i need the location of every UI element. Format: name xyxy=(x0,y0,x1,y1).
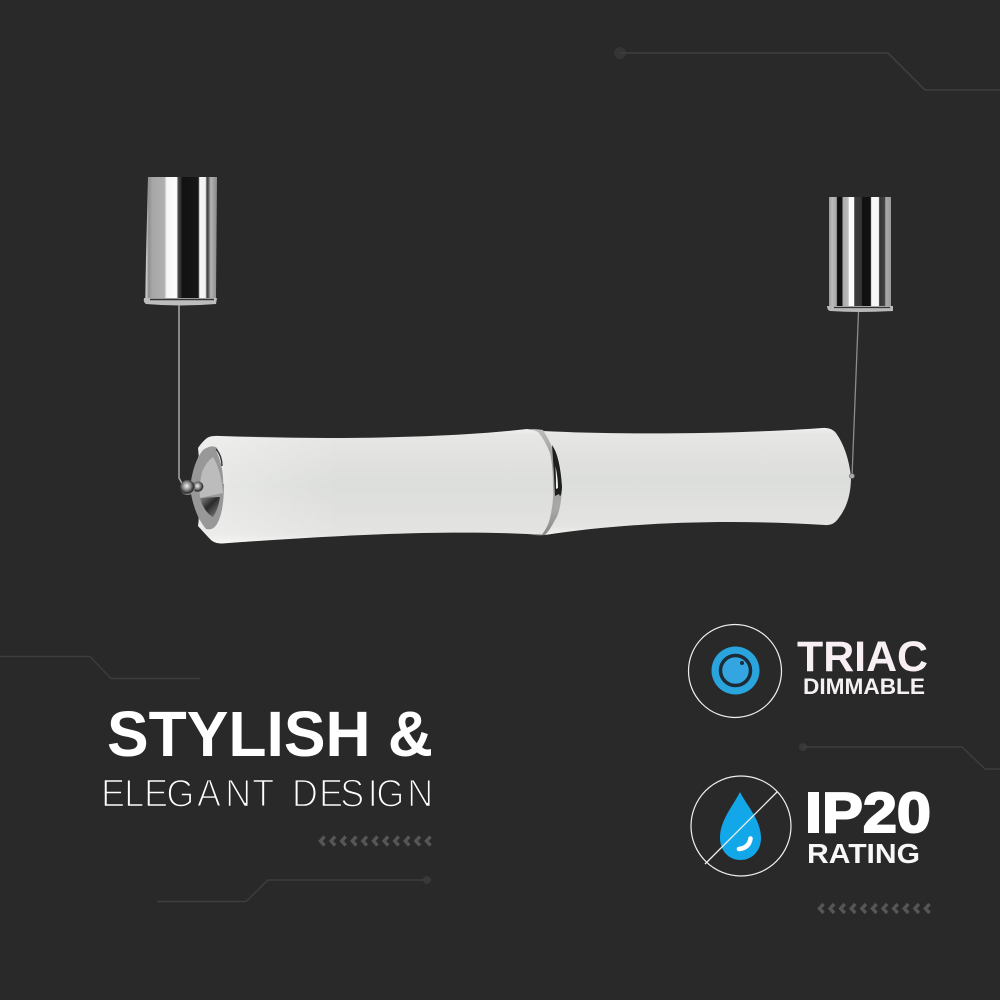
left end cap chrome xyxy=(190,446,224,529)
label: triac dimmable: DIMMABLE xyxy=(803,674,925,699)
label: ip20 rating xyxy=(805,781,931,869)
icon: no water drop xyxy=(691,776,791,876)
lamp: right canopy xyxy=(827,197,893,312)
circuit line: right middle xyxy=(799,743,1000,769)
chrome ring shadow and highlight xyxy=(552,445,562,496)
left end highlight xyxy=(198,436,340,544)
left tube segment xyxy=(198,429,558,544)
label: ip20 rating: IP20 xyxy=(805,781,931,845)
circuit line: top right xyxy=(614,47,1000,90)
subheading: elegant design: ELEGANT DESIGN xyxy=(101,771,433,815)
circuit line: left middle xyxy=(0,656,200,678)
icon: dimmable xyxy=(688,624,782,718)
label: ip20 rating: RATING xyxy=(807,838,920,869)
lamp: white tube body xyxy=(190,428,851,544)
lamp: suspension wires xyxy=(179,305,858,487)
right tube segment xyxy=(543,428,851,535)
lamp: finial balls xyxy=(180,474,854,495)
decorative chevrons: left xyxy=(320,836,430,846)
heading: stylish &: STYLISH & xyxy=(107,698,433,770)
circuit line: bottom left xyxy=(157,876,431,902)
decorative chevrons: right xyxy=(820,904,930,913)
lamp: left canopy xyxy=(144,177,217,306)
label: triac dimmable: TRIAC xyxy=(797,633,928,681)
chrome ring joint xyxy=(528,429,562,535)
